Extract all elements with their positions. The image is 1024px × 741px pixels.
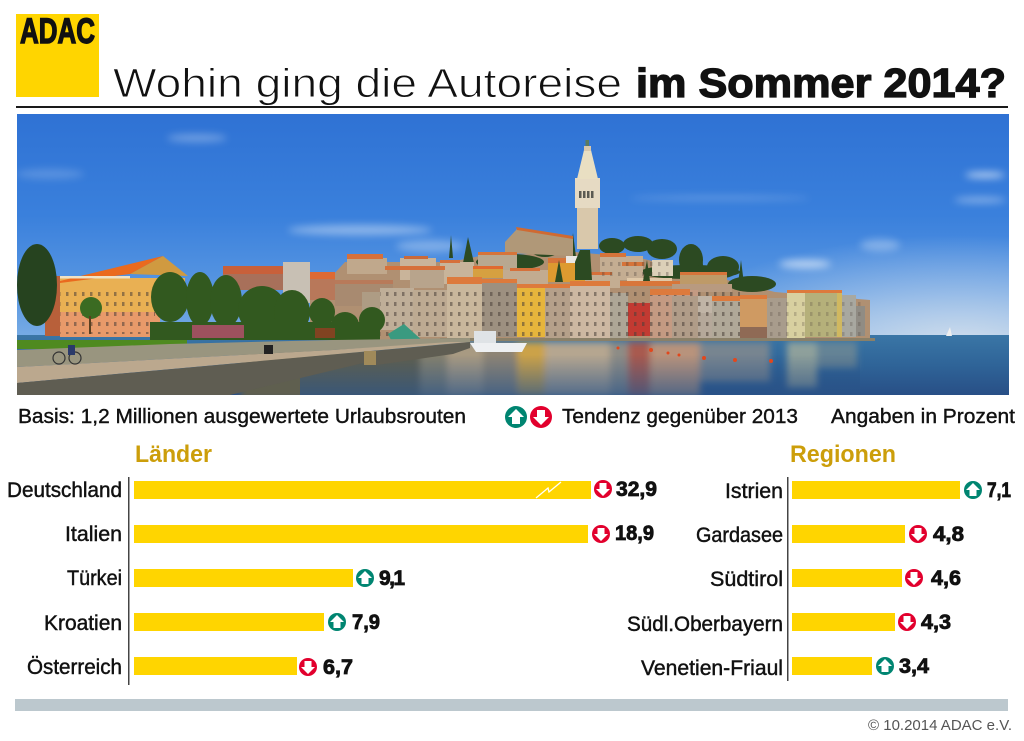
row: Italien: Italien — [65, 523, 122, 546]
title: Wohin ging die Autoreise — [113, 60, 622, 106]
row: Istrien — [725, 479, 1011, 503]
row: Österreich — [27, 656, 353, 679]
row: Gardasee: Gardasee — [696, 524, 783, 547]
row: Südl.Oberbayern — [627, 611, 951, 636]
row: Türkei: 9,1 — [379, 567, 405, 590]
row: Südtirol: Südtirol — [710, 568, 783, 591]
row: Südtirol: 4,6 — [931, 567, 961, 590]
bell tower — [575, 140, 600, 249]
row: Istrien: Istrien — [725, 480, 783, 503]
row: Südtirol — [710, 567, 961, 591]
copyright: © 10.2014 ADAC e.V. — [868, 717, 1012, 734]
row: Venetien-Friaul — [641, 655, 929, 680]
row: Türkei: Türkei — [67, 567, 122, 590]
row: Deutschland: Deutschland — [7, 479, 122, 502]
hill trees — [449, 233, 776, 292]
title — [113, 60, 1006, 106]
row: Südl.Oberbayern: Südl.Oberbayern — [627, 613, 783, 636]
icon: up arrow legend — [505, 406, 527, 428]
quay and promenade — [17, 338, 470, 395]
row: Südl.Oberbayern: 4,3 — [921, 611, 951, 634]
legend line: Angaben in Prozent — [831, 406, 1015, 428]
row: Kroatien — [44, 611, 380, 635]
row: Gardasee — [696, 523, 964, 547]
title: im Sommer 2014? — [636, 60, 1006, 106]
bar chart: Regionen — [627, 477, 1011, 681]
icon: down arrow legend — [530, 406, 552, 428]
ADAC logo: ADAC — [20, 12, 95, 51]
legend line — [18, 406, 1015, 428]
bar chart: Länder — [7, 477, 657, 685]
row: Italien — [65, 522, 654, 546]
photo: harbour town of Rovinj — [16, 114, 1024, 455]
footer band — [15, 699, 1008, 711]
left buildings and greenery — [17, 244, 424, 349]
row: Kroatien: Kroatien — [44, 612, 122, 635]
row: Deutschland: 32,9 — [616, 478, 657, 501]
boats — [470, 327, 952, 352]
row: Türkei — [67, 567, 405, 590]
upper town houses — [347, 250, 732, 292]
heading: Länder: Länder — [135, 441, 212, 468]
row: Gardasee: 4,8 — [933, 523, 964, 546]
ADAC logo — [16, 12, 99, 97]
row: Venetien-Friaul: Venetien-Friaul — [641, 657, 783, 680]
heading: Regionen: Regionen — [790, 441, 896, 468]
legend line: Basis: 1,2 Millionen ausgewertete Urlaubsrouten — [18, 406, 466, 428]
church — [505, 227, 573, 256]
left town houses — [223, 262, 393, 312]
row: Kroatien: 7,9 — [352, 611, 380, 634]
row: Venetien-Friaul: 3,4 — [899, 655, 929, 678]
waterfront houses — [380, 277, 875, 341]
hillside backing — [310, 252, 870, 340]
sea — [17, 335, 1009, 395]
legend line: Tendenz gegenüber 2013 — [562, 406, 798, 428]
buoys — [616, 346, 773, 363]
row: Istrien: 7,1 — [987, 479, 1011, 502]
row: Deutschland — [7, 478, 657, 502]
row: Österreich: Österreich — [27, 656, 122, 679]
row: Österreich: 6,7 — [323, 656, 353, 679]
row: Italien: 18,9 — [615, 522, 654, 545]
